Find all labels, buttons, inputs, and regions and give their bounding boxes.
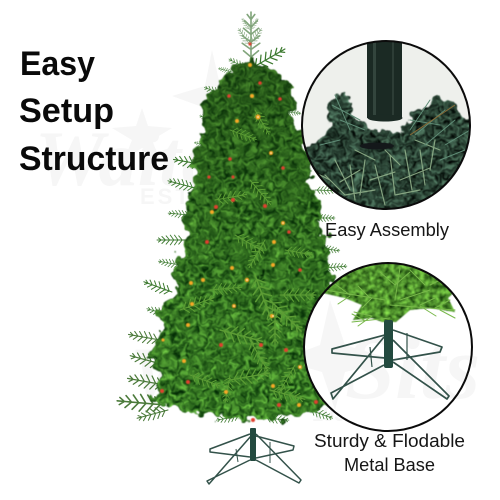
support pole bbox=[367, 38, 402, 118]
caption: sturdy and foldable metal base: Metal Base bbox=[344, 455, 435, 475]
tree stand bbox=[207, 428, 301, 484]
title: Setup bbox=[19, 92, 114, 130]
tree body bbox=[150, 60, 342, 420]
caption: sturdy and foldable metal base: Sturdy & Flodable bbox=[314, 431, 465, 451]
faint watermark in circle bbox=[306, 302, 384, 408]
tree bbox=[116, 12, 347, 424]
caption: sturdy and foldable metal base bbox=[314, 431, 465, 475]
tree lights bbox=[160, 42, 330, 422]
foliage mass bbox=[306, 91, 469, 208]
title: Structure bbox=[19, 140, 169, 178]
caption: easy assembly: Easy Assembly bbox=[325, 220, 449, 240]
outer branches bbox=[116, 12, 347, 424]
socket bbox=[360, 142, 394, 150]
pale needles bbox=[310, 140, 440, 205]
callout: metal base photo: Sits bbox=[345, 319, 480, 418]
callout: metal base photo bbox=[303, 262, 473, 432]
watermark logos: Waite bbox=[130, 333, 306, 417]
watermark logos bbox=[35, 50, 480, 426]
callout: easy assembly photo bbox=[300, 38, 475, 215]
title: Easy bbox=[20, 45, 95, 83]
watermark logos: EST bbox=[140, 184, 192, 209]
inner bright boughs bbox=[178, 108, 316, 405]
watermark logos: 1932 bbox=[312, 404, 356, 426]
foliage bbox=[324, 264, 456, 323]
watermark logos: Sits bbox=[345, 319, 480, 418]
metal stand bbox=[331, 330, 449, 399]
watermark logos: Waite bbox=[35, 115, 216, 202]
title bbox=[19, 45, 169, 178]
